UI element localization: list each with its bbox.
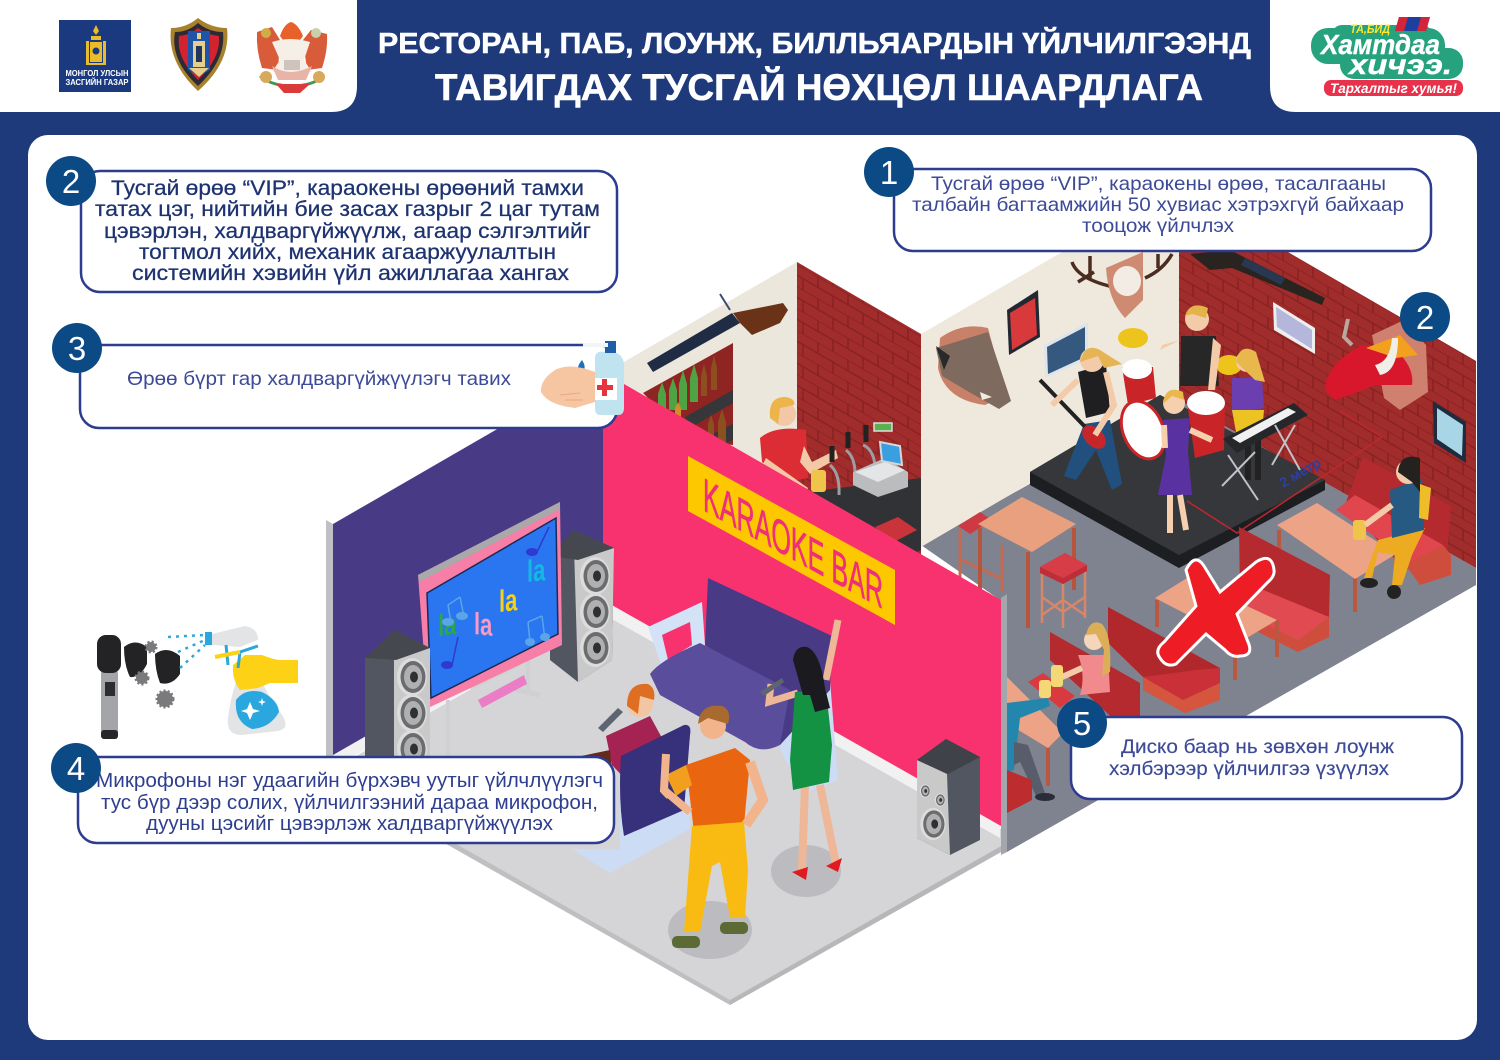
title xyxy=(378,26,1251,108)
deer trophy xyxy=(1072,252,1172,318)
stage xyxy=(1030,395,1325,568)
baseboard xyxy=(333,600,1000,838)
logo: government of Mongolia: ЗАСГИЙН ГАЗАР xyxy=(66,76,129,87)
white picture xyxy=(1273,302,1315,354)
callout 4: microphone cover xyxy=(78,757,614,843)
callout 3: sanitizer: Өрөө бүрт гар халдваргүйжүүлэгч тавих xyxy=(127,368,511,390)
middle booth xyxy=(1239,527,1330,652)
logo: Ulaanbaatar emblem xyxy=(257,22,327,93)
callout 2: VIP cleaning xyxy=(81,171,617,292)
lyrics xyxy=(438,553,546,643)
badge 5: 5 xyxy=(1073,705,1091,742)
callout 1: capacity: Тусгай өрөө “VIP”, караокены өрөө, тасалгааны xyxy=(931,173,1386,195)
left booth with guests xyxy=(1007,622,1140,813)
campaign logo xyxy=(1311,17,1463,96)
floor xyxy=(330,606,1003,1005)
callout 2: VIP cleaning: системийн хэвийн үйл ажиллагаа хангах xyxy=(132,262,570,285)
header left logo panel xyxy=(0,0,357,112)
badge 4: 4 xyxy=(67,750,85,787)
front booth xyxy=(1108,607,1220,713)
germs xyxy=(136,642,173,707)
callout 1: capacity xyxy=(894,169,1431,251)
shadow xyxy=(668,901,752,959)
brick wall xyxy=(797,262,921,560)
badge 5 xyxy=(1057,698,1107,748)
callout 4: microphone cover: Микрофоны нэг удаагийн бүрхэвч уутыг үйлчлүүлэгч xyxy=(96,770,603,792)
icon: microphone sanitizing xyxy=(97,626,298,739)
cream wall xyxy=(603,262,797,520)
purple wall xyxy=(333,368,603,755)
logo: police shield xyxy=(171,18,227,91)
man in orange shirt xyxy=(664,706,763,959)
shotgun xyxy=(647,294,788,372)
light blue picture xyxy=(1433,401,1466,463)
icon: hand sanitizer xyxy=(541,341,624,415)
beer taps xyxy=(832,425,866,462)
back sofa xyxy=(648,578,838,792)
distance label: 2 метр xyxy=(1276,454,1324,491)
callout 5: disco bar: хэлбэрээр үйлчилгээ үзүүлэх xyxy=(1109,758,1389,780)
spray bottle xyxy=(212,626,258,647)
drummer xyxy=(1160,305,1221,390)
badge 2 left xyxy=(46,156,96,206)
callout 2: VIP cleaning: тогтмол хийх, механик агааржуулалтын xyxy=(139,241,556,264)
lyrics: la xyxy=(438,607,457,643)
grey wall end xyxy=(326,520,333,770)
badge 1: 1 xyxy=(880,154,898,191)
woman in green dress xyxy=(760,620,842,897)
front speaker xyxy=(917,739,980,855)
callout 1: capacity: тооцож үйлчлэх xyxy=(1082,215,1234,237)
bartender xyxy=(760,397,838,496)
mic covers xyxy=(124,642,180,684)
right booth with seated man xyxy=(1277,457,1451,612)
title line 2: ТАВИГДАХ ТУСГАЙ НӨХЦӨЛ ШААРДЛАГА xyxy=(435,66,1203,108)
bar counter xyxy=(800,478,921,560)
drum kit xyxy=(1113,328,1242,465)
logo: government of Mongolia xyxy=(59,20,131,92)
left speaker xyxy=(365,630,430,770)
red stool xyxy=(875,517,917,543)
cash register xyxy=(853,423,908,497)
logo: government of Mongolia: МОНГОЛ УЛСЫН xyxy=(66,68,128,78)
cream wall xyxy=(921,184,1179,547)
shadow xyxy=(771,845,841,897)
callout 3: sanitizer xyxy=(80,345,617,428)
front sofa xyxy=(572,725,690,873)
music notes xyxy=(448,597,464,623)
back room: bar xyxy=(603,262,921,560)
callout 5: disco bar: Диско баар нь зөвхөн лоунж xyxy=(1121,736,1394,758)
keyboard xyxy=(1222,403,1308,500)
dragon trophy xyxy=(1325,319,1428,410)
seated man xyxy=(562,684,662,795)
badge 2 left: 2 xyxy=(62,163,80,200)
title line 1: РЕСТОРАН, ПАБ, ЛОУНЖ, БИЛЛЬЯАРДЫН ҮЙЛЧИЛГЭЭНД xyxy=(378,26,1251,60)
callout 2: VIP cleaning: Тусгай өрөө “VIP”, караокены өрөөний тамхи xyxy=(111,177,584,200)
floor xyxy=(921,400,1476,852)
karaoke bar sign: KARAOKE BAR xyxy=(703,467,883,619)
wall edge xyxy=(1001,594,1007,855)
red picture xyxy=(1007,290,1040,355)
spray mist xyxy=(168,635,205,668)
boar head trophy xyxy=(936,326,1011,409)
keyboardist xyxy=(1232,349,1265,480)
high table with stools xyxy=(958,497,1087,628)
campaign logo: хичээ. xyxy=(1347,49,1452,80)
badge 3 xyxy=(52,323,102,373)
campaign logo: Хамтдаа xyxy=(1319,29,1440,60)
right speaker xyxy=(550,530,614,682)
campaign logo: ТА,БИД xyxy=(1350,22,1390,36)
lyrics: la xyxy=(499,583,518,619)
blue picture xyxy=(1044,322,1088,378)
right room: lounge xyxy=(921,184,1476,852)
badge 3: 3 xyxy=(68,330,86,367)
badge 4 xyxy=(51,743,101,793)
badge 2 right: 2 xyxy=(1416,299,1434,336)
no-disco X mark xyxy=(1158,558,1274,665)
singer xyxy=(1158,390,1212,533)
guitarist xyxy=(1040,348,1122,490)
pink wall xyxy=(603,372,1001,826)
microphone xyxy=(97,635,121,739)
karaoke room xyxy=(326,368,1007,1005)
brick wall xyxy=(1179,189,1476,568)
middle table xyxy=(1155,578,1277,680)
callout 2: VIP cleaning: татах цэг, нийтийн бие засах газрыг 2 цаг тутам xyxy=(95,198,600,221)
lyrics: la xyxy=(474,606,493,643)
badge 1 xyxy=(864,147,914,197)
lyrics: la xyxy=(527,553,546,589)
shelves with bottles xyxy=(643,343,733,445)
TV screen xyxy=(418,502,562,792)
yellow glove xyxy=(233,655,298,690)
header right logo panel xyxy=(1270,0,1500,112)
callout 4: microphone cover: дууны цэсийг цэвэрлэж халдваргүйжүүлэх xyxy=(146,813,553,835)
callout 5: disco bar xyxy=(1071,717,1462,799)
callout 1: capacity: талбайн багтаамжийн 50 хувиас хэтрэхгүй байхаар xyxy=(912,194,1404,216)
red distance lines xyxy=(1187,411,1382,533)
badge 2 right xyxy=(1400,292,1450,342)
callout 2: VIP cleaning: цэвэрлэн, халдваргүйжүүлж, агаар сэлгэлтийг xyxy=(104,220,591,243)
band xyxy=(1040,305,1308,533)
campaign logo: Тархалтыг хумья! xyxy=(1330,80,1457,96)
callout 4: microphone cover: тус бүр дээр солих, үйлчилгээний дараа микрофон, xyxy=(101,792,598,814)
beer mug xyxy=(811,470,826,492)
rifle trophy xyxy=(1190,250,1325,305)
karaoke bar sign xyxy=(688,456,895,625)
